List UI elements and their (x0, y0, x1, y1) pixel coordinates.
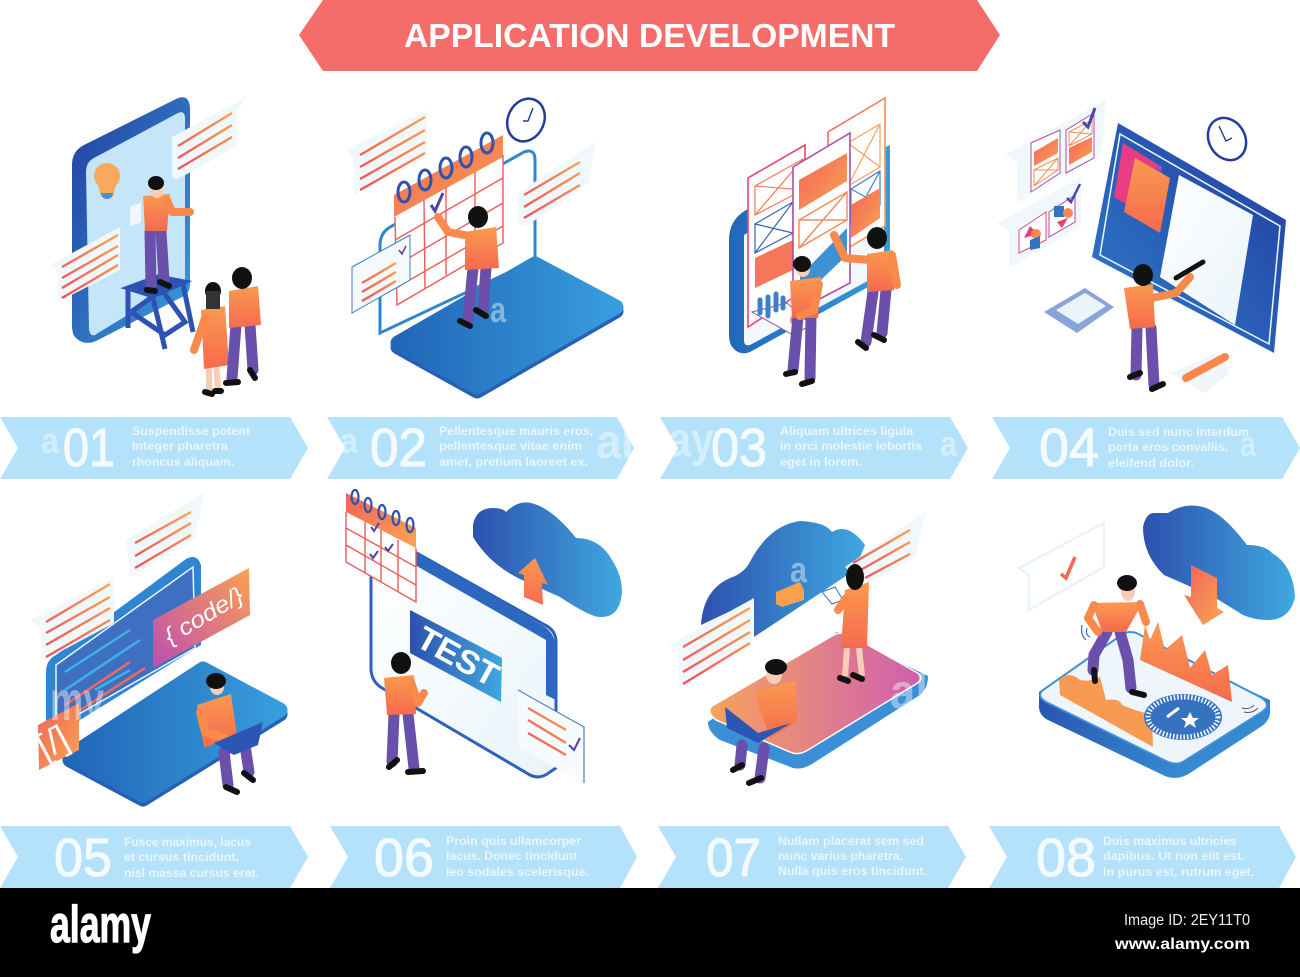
platform top (710, 633, 921, 754)
title banner (299, 0, 1000, 71)
icon: wall clock (500, 92, 552, 148)
ribbon 01: 01 (63, 418, 115, 478)
ribbon 06 (330, 826, 637, 888)
test button: TEST (411, 619, 506, 694)
ribbon 02: amet, pretium laoreet ex. (439, 455, 588, 469)
ribbon 03: Aliquam ultrices ligula (780, 424, 913, 438)
ribbon 05: et cursus tincidunt, (124, 850, 239, 864)
speech card top (126, 492, 205, 577)
stock watermarks: a (340, 420, 359, 461)
ribbon 07: Nullam placerat sem sed (778, 834, 924, 848)
person: man at calendar (438, 206, 499, 326)
stock watermarks: ay (668, 414, 714, 467)
phone screen (744, 150, 884, 345)
icon: orange arrow (776, 582, 804, 607)
ribbon 02: pellentesque vitae enim (439, 439, 582, 453)
cloud (1143, 505, 1295, 620)
code label (153, 568, 250, 668)
calendar (346, 490, 416, 602)
wireframe card back (828, 98, 885, 260)
wireframe card left (748, 145, 805, 327)
wireframe card middle (793, 133, 850, 313)
calendar (394, 133, 503, 305)
checklist card (352, 235, 410, 313)
ribbon 07: 07 (706, 828, 761, 888)
ribbon 08: 08 (1036, 828, 1096, 888)
phone screen (86, 112, 185, 335)
footer bar (0, 888, 1300, 977)
panel: step 08 illustration, launch (1019, 505, 1295, 778)
laptop base (70, 669, 280, 799)
stock watermarks: a (790, 549, 808, 590)
speech card left (669, 598, 754, 688)
website: www.alamy.com (1114, 936, 1250, 953)
ribbon 08: Duis maximus ultricies (1103, 834, 1237, 848)
wifi symbol right (1242, 705, 1258, 712)
stock watermarks: al (890, 666, 928, 719)
panel: step 06 illustration, testing (346, 490, 622, 783)
chart right (1140, 622, 1232, 702)
ribbon 01 (0, 417, 308, 479)
ribbon 08 (989, 826, 1296, 888)
panel: step 07 illustration, cloud collaboration (669, 511, 928, 783)
ribbon 05: 05 (54, 828, 112, 888)
laptop screen (380, 151, 535, 333)
ribbon 08: In purus est, rutrum eget. (1103, 865, 1254, 879)
platform side (708, 632, 928, 769)
stock watermarks: my (50, 669, 104, 732)
person: woman (194, 282, 229, 394)
ribbon 06: lacus. Donec tincidunt (446, 849, 577, 863)
step stool (128, 277, 193, 349)
ribbon 01: rhoncus aliquam. (132, 455, 234, 469)
stock watermarks: a (41, 420, 60, 461)
cloud (473, 502, 622, 617)
chart on tablet (752, 294, 811, 335)
ribbon 03: eget in lorem. (780, 455, 862, 469)
title banner: APPLICATION DEVELOPMENT (404, 17, 895, 54)
panel: step 04 illustration, design board (997, 100, 1286, 393)
person: man on stool (130, 176, 190, 291)
person: man with tablet (786, 256, 821, 384)
cloud (701, 521, 865, 637)
person: man with backpack (226, 267, 261, 383)
ribbon 01: Suspendisse potent (132, 424, 250, 438)
ribbon 04 (992, 417, 1300, 479)
ribbon 03: 03 (711, 418, 767, 478)
platform top (1040, 632, 1267, 764)
ribbon 04: eleifend dolor. (1108, 456, 1194, 470)
ribbon 05: nisl massa cursus erat. (124, 866, 259, 880)
tablet screen (371, 552, 556, 777)
ribbon 06: leo sodales scelerisque. (446, 865, 589, 879)
speech card right (518, 142, 595, 227)
design board (1092, 123, 1286, 353)
person: man with phone (384, 652, 424, 772)
bracket tile: [/] (30, 717, 75, 767)
person: sitting man with laptop (725, 659, 797, 783)
icon: upload arrow (518, 558, 548, 605)
speech card right (845, 511, 926, 585)
speech card left (31, 577, 114, 662)
speech card left (346, 110, 427, 195)
panel: step 01 illustration, phone with idea (50, 96, 261, 394)
ribbon 03 (660, 417, 968, 479)
speech card lower (50, 227, 120, 302)
icon: light bulb (94, 163, 120, 199)
laptop screen (46, 557, 201, 736)
person: running man (1088, 575, 1146, 695)
speech card lower (997, 177, 1081, 268)
stock watermarks: al (596, 416, 634, 469)
checklist card (518, 690, 584, 783)
person: woman with tablet (822, 564, 869, 681)
stock watermarks: a (1240, 423, 1257, 464)
panel: step 05 illustration, coding (30, 492, 280, 799)
stock watermarks: a (940, 423, 958, 464)
phone frame (72, 97, 190, 343)
stock watermarks (41, 289, 1257, 732)
chart left (1059, 675, 1153, 747)
ribbon 04: 04 (1039, 418, 1099, 478)
ribbon 04: porta eros convallis, (1108, 440, 1228, 454)
stock watermarks: a (490, 289, 507, 330)
ribbon 06: 06 (374, 828, 434, 888)
ribbon 02: Pellentesque mauris eros, (439, 424, 593, 438)
dial badge (1144, 694, 1222, 740)
ribbon 07: Nulla quis eros tincidunt. (778, 864, 927, 878)
platform side (1039, 633, 1270, 778)
image id: Image ID: 2EY11T0 (1124, 912, 1250, 929)
icon: wall clock (1200, 111, 1254, 167)
wifi symbol left (1082, 625, 1090, 640)
bracket tile (30, 703, 79, 770)
ribbon 03: in orci molestie lobortis (780, 439, 922, 453)
tablet top edge (415, 552, 556, 700)
laptop base (398, 264, 616, 391)
ribbon 05: Fusce maximus, lacus (124, 835, 251, 849)
code label: { code/} (159, 581, 248, 649)
person: man at wireframes (834, 227, 897, 348)
tablet on floor (1044, 288, 1114, 333)
ribbon 07: nunc varius pharetra. (778, 849, 903, 863)
ribbon 08: dapibus. Ut non elit est. (1103, 849, 1245, 863)
ribbon 06: Proin quis ullamcorper (446, 834, 581, 848)
screen code area (56, 567, 195, 727)
ribbon 02: 02 (370, 418, 427, 478)
person: sitting man with laptop (197, 673, 263, 792)
ribbon 02 (327, 417, 634, 479)
phone frame (729, 145, 890, 353)
ribbon 05 (0, 826, 308, 888)
speech card upper (172, 96, 247, 179)
speech card upper (1004, 100, 1106, 203)
pencil on paper (1170, 352, 1230, 393)
panel: step 03 illustration, wireframes (729, 98, 897, 384)
icon: download arrow (1184, 565, 1224, 625)
person: man drawing on board (1124, 262, 1203, 389)
ribbon 07 (658, 826, 966, 888)
alamy logo: alamy (50, 896, 151, 954)
panel: step 02 illustration, calendar planning (346, 92, 616, 391)
ribbon 04: Duis sed nunc interdum (1108, 425, 1249, 439)
ribbon 01: Integer pharetra (132, 439, 228, 453)
check card (1019, 523, 1104, 610)
